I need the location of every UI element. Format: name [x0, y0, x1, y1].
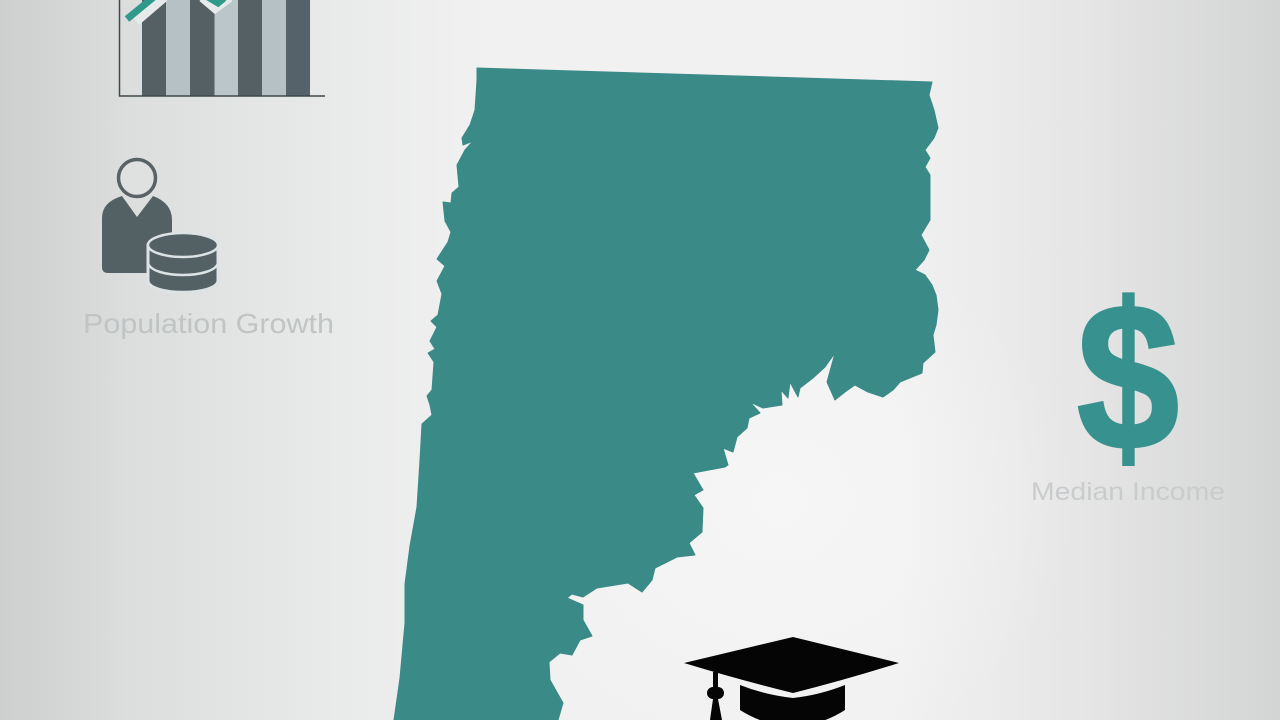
- cap tassel: [707, 672, 724, 720]
- coin stack: [148, 233, 218, 292]
- cap base: [740, 685, 845, 720]
- icon: person with coin stack: [102, 160, 218, 292]
- icon: bar chart with trend line: [120, 0, 325, 96]
- person body: [102, 196, 172, 273]
- chart axes: [120, 0, 325, 96]
- trend line: [127, 0, 230, 21]
- label: median income: Median Income: [1031, 478, 1225, 506]
- person head: [118, 160, 156, 196]
- icon: graduation cap: [684, 637, 899, 720]
- icon: dollar sign: $: [1077, 260, 1179, 494]
- state map silhouette: [394, 68, 938, 720]
- chart bars: [142, 0, 310, 96]
- label: population growth: Population Growth: [83, 308, 334, 339]
- cap board: [684, 637, 899, 693]
